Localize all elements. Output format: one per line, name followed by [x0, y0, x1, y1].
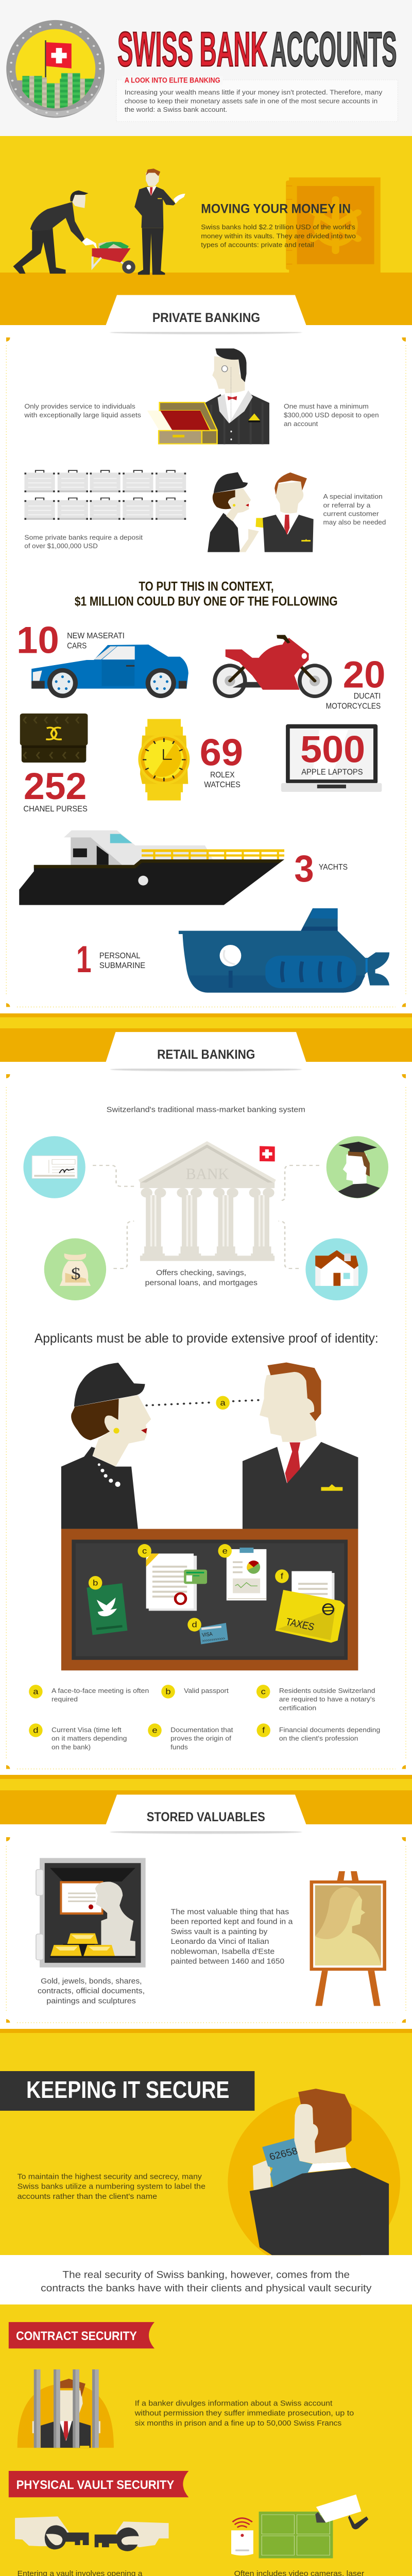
- heading tab: retail banking: RETAIL BANKING: [157, 1047, 255, 1061]
- background: white strip: [0, 2255, 412, 2304]
- figure: client pushing wheelbarrow: [13, 191, 135, 274]
- passport: b: [93, 1579, 98, 1587]
- icon: sensors and camera: [231, 2495, 368, 2558]
- marker a: [216, 1396, 230, 1410]
- panel: retail banking: [23, 1032, 388, 1346]
- origin of funds document: [218, 1544, 266, 1600]
- text: moving money description: Swiss banks hold $2.2 trillion USD of the world's: [201, 224, 355, 231]
- legend: c: certification: [279, 1704, 316, 1711]
- legend: a: A face-to-face meeting is often: [52, 1687, 149, 1694]
- text: minimum deposit: $300,000 USD deposit to open: [284, 411, 379, 419]
- ribbon: contract security: CONTRACT SECURITY: [16, 2329, 137, 2343]
- text: da vinci painting: Leonardo da Vinci of Italian: [171, 1938, 269, 1946]
- panel: private banking: [16, 348, 386, 710]
- text: vault contents: Gold, jewels, bonds, shares,: [41, 1977, 142, 1986]
- background: keeping it secure: [0, 2029, 412, 2255]
- item: chanel purses: 252: [24, 766, 87, 807]
- item: personal submarine: [76, 908, 389, 993]
- text: invitation required: current customer: [323, 510, 379, 517]
- background: moving money yellow band: [0, 136, 412, 273]
- visa card: [187, 1618, 228, 1644]
- heading tab: private banking: [106, 295, 306, 334]
- icon: ten briefcases: [24, 470, 186, 520]
- text: numbering system: [18, 2173, 205, 2200]
- legend: e: e: [152, 1726, 158, 1735]
- text: da vinci painting: Swiss vault is a painting by: [171, 1928, 267, 1936]
- icon: safe door: [286, 177, 381, 273]
- tax folder: TAXES: [284, 1616, 316, 1633]
- text: invitation required: or referral by a: [323, 501, 371, 509]
- origin of funds document: e: [222, 1547, 228, 1555]
- visa card: d: [192, 1620, 197, 1629]
- text: private banking for large assets: Only provides service to individuals: [24, 402, 135, 410]
- panel: header: [6, 20, 398, 122]
- legend: d: Current Visa (time left: [52, 1726, 122, 1734]
- heading tab: stored valuables: [106, 1794, 306, 1834]
- text: private banking for large assets: with exceptionally large liquid assets: [24, 411, 141, 419]
- item: twenty ducati motorcycles: 20: [343, 654, 385, 696]
- legend: b: Valid passport: [184, 1687, 229, 1694]
- text: real security statement: contracts the banks have with their clients and physical vault security: [41, 2282, 372, 2294]
- text: retail offerings: Offers checking, savings,: [156, 1269, 246, 1277]
- panel: legend lower row and stored valuables: [29, 1723, 386, 2006]
- legend: d: [29, 1723, 127, 1751]
- intro box: the world: a Swiss bank account.: [125, 106, 227, 113]
- text: minimum deposit: One must have a minimum: [284, 402, 369, 410]
- connectors: [93, 1165, 319, 1268]
- intro box: [116, 76, 398, 122]
- heading tab: retail banking: [106, 1032, 306, 1071]
- visa card: >>>>>>>>>>>>: [202, 1636, 226, 1643]
- heading: million context: TO PUT THIS IN CONTEXT,: [139, 579, 274, 594]
- item: rolex watches: 69: [200, 732, 243, 774]
- icon: graduate: [327, 1136, 388, 1198]
- background: retail banking panel: [0, 1062, 412, 1775]
- legend: c: [256, 1685, 375, 1711]
- item: apple laptops: APPLE LAPTOPS: [301, 768, 363, 776]
- figure: woman client: [61, 1363, 151, 1529]
- text: numbering system: To maintain the highest security and secrecy, many: [18, 2173, 202, 2181]
- legend: e: [148, 1723, 233, 1751]
- text: moving money description: types of accounts: private and retail: [201, 242, 314, 249]
- item: rolex watches: WATCHES: [204, 780, 241, 789]
- document board: [61, 1529, 358, 1670]
- text: real security statement: [41, 2269, 372, 2294]
- text: banker prosecution: [134, 2400, 354, 2428]
- dotted line: face to face: [147, 1400, 259, 1405]
- intro box: Increasing your wealth means little if your money isn't protected. Therefore, many: [125, 89, 383, 96]
- text: moving money description: money within its vaults. They are divided into two: [201, 232, 356, 240]
- item: personal submarine: SUBMARINE: [99, 961, 145, 970]
- item: personal submarine: 1: [76, 939, 92, 980]
- text: invitation required: A special invitation: [323, 493, 383, 500]
- item: ten maserati cars: CARS: [67, 641, 87, 650]
- figure: man with numbered card: 62658: [268, 2145, 299, 2162]
- panel frame: retail banking: [6, 1074, 406, 1769]
- text: retail offerings: [145, 1269, 258, 1287]
- icon: two keys: [15, 2516, 169, 2551]
- heading banner: keeping it secure: [0, 2071, 254, 2111]
- background: ground band: [0, 273, 412, 325]
- text: numbering system: accounts rather than the client's name: [18, 2193, 157, 2200]
- legend: f: [256, 1723, 380, 1742]
- text: over one million deposit: [24, 534, 143, 550]
- item: chanel purses: CHANEL PURSES: [23, 804, 88, 814]
- text: minimum deposit: [284, 402, 379, 428]
- background: retail divider: [0, 1013, 412, 1062]
- item: yachts: YACHTS: [319, 863, 348, 872]
- heading tab: private banking: PRIVATE BANKING: [152, 310, 260, 325]
- text: over one million deposit: Some private banks require a deposit: [24, 534, 143, 541]
- heading: million context: [75, 579, 338, 608]
- item: ten maserati cars: [16, 619, 188, 698]
- icon: vault porthole with flag and money: [6, 20, 105, 118]
- panel frame: private banking: [6, 337, 406, 1007]
- tax folder: [275, 1569, 345, 1642]
- legend: d: d: [33, 1726, 38, 1735]
- notary certificate: c: [142, 1547, 147, 1555]
- text: retail description: Switzerland's traditional mass-market banking system: [107, 1106, 305, 1114]
- item: chanel purses: [20, 714, 88, 814]
- legend: f: on the client's profession: [279, 1735, 358, 1742]
- text: private banking for large assets: [24, 402, 141, 419]
- legend: f: f: [262, 1726, 265, 1735]
- heading banner: keeping it secure: KEEPING IT SECURE: [26, 2076, 229, 2103]
- icon: money bag: [44, 1239, 106, 1300]
- text: da vinci painting: [171, 1908, 293, 1965]
- legend: b: [161, 1685, 229, 1699]
- figure: referral couple: [208, 472, 314, 552]
- legend: f: Financial documents depending: [279, 1726, 380, 1734]
- item: yachts: [19, 831, 348, 905]
- icon: bank building: [139, 1141, 276, 1261]
- item: apple laptops: 500: [300, 728, 365, 771]
- legend: b: b: [165, 1687, 171, 1696]
- icon: cheque: [23, 1136, 85, 1198]
- item: rolex watches: ROLEX: [210, 770, 235, 779]
- panel: moving your money in: [13, 168, 381, 334]
- tax folder: f: [281, 1572, 283, 1581]
- marker a: a: [220, 1398, 226, 1407]
- passport: [87, 1576, 127, 1635]
- legend: a: required: [52, 1696, 78, 1703]
- panel: luxury items: [19, 714, 389, 993]
- icon: house: [305, 1239, 368, 1300]
- item: twenty ducati motorcycles: [213, 635, 385, 710]
- text: retail offerings: personal loans, and mortgages: [145, 1279, 258, 1287]
- ribbon: physical vault security: PHYSICAL VAULT SECURITY: [16, 2478, 175, 2492]
- legend: c: are required to have a notary's: [279, 1696, 375, 1703]
- text: da vinci painting: painted between 1460 and 1650: [171, 1958, 284, 1965]
- text: da vinci painting: noblewoman, Isabella d'Este: [171, 1947, 274, 1956]
- icon: bank building: BANK: [186, 1165, 229, 1183]
- background: stored valuables panel: [0, 1824, 412, 2029]
- figure: man with numbered card: [228, 2089, 400, 2269]
- item: yachts: 3: [294, 848, 314, 890]
- item: ten maserati cars: NEW MASERATI: [67, 632, 125, 640]
- text: numbering system: Swiss banks utilize a numbering system to label the: [18, 2183, 205, 2191]
- text: vault contents: [38, 1977, 145, 2005]
- text: invitation required: may also be needed: [323, 518, 386, 526]
- panel: physical vault security: [9, 2471, 392, 2576]
- visa card: VISA: [201, 1631, 213, 1638]
- background: stored valuables divider: [0, 1775, 412, 1824]
- text: vault contents: contracts, official documents,: [38, 1987, 145, 1995]
- intro box: choose to keep their monetary assets safe in one of the most secure accounts in: [125, 97, 377, 105]
- legend: d: on it matters depending: [52, 1735, 127, 1742]
- legend: e: proves the origin of: [170, 1735, 231, 1742]
- icon: money bag: $: [71, 1264, 81, 1283]
- panel: identity proof: [29, 1363, 375, 1711]
- text: banker prosecution: six months in prison and a fine up to 50,000 Swiss Francs: [135, 2419, 341, 2428]
- text: moving money description: [201, 224, 356, 249]
- item: twenty ducati motorcycles: MOTORCYCLES: [326, 702, 381, 710]
- icon: painting on easel: [310, 1871, 386, 2006]
- background: header band: [0, 0, 412, 136]
- panel frame: stored valuables: [6, 1837, 406, 2023]
- item: personal submarine: PERSONAL: [99, 951, 140, 960]
- heading: moving your money in: MOVING YOUR MONEY IN: [201, 201, 351, 216]
- legend: a: [29, 1685, 149, 1703]
- ribbon: physical vault security: [9, 2471, 188, 2497]
- figure: banker behind bars: [18, 2369, 114, 2448]
- legend: a: a: [33, 1687, 39, 1696]
- legend: c: c: [261, 1687, 266, 1696]
- text: invitation required: [323, 493, 386, 526]
- item: ten maserati cars: 10: [16, 619, 59, 662]
- text: banker prosecution: without permission they suffer immediate prosecution, up to: [134, 2410, 354, 2417]
- legend: e: Documentation that: [170, 1726, 233, 1734]
- legend: e: funds: [170, 1743, 188, 1751]
- text: banker prosecution: If a banker divulges information about a Swiss account: [135, 2400, 333, 2408]
- panel: keeping it secure: [0, 2071, 400, 2448]
- figure: banker: [134, 168, 185, 275]
- text: over one million deposit: of over $1,000,000 USD: [24, 542, 98, 550]
- item: rolex watches: [138, 719, 243, 801]
- item: twenty ducati motorcycles: DUCATI: [354, 692, 381, 701]
- text: vault contents: paintings and sculptures: [46, 1997, 136, 2005]
- heading tab: stored valuables: STORED VALUABLES: [147, 1809, 265, 1824]
- notary certificate: [138, 1544, 207, 1611]
- text: da vinci painting: been reported kept and found in a: [171, 1918, 293, 1926]
- background: private banking panel: [0, 325, 412, 1013]
- ribbon: contract security: [9, 2322, 154, 2348]
- figure: monocle banker with case: [147, 348, 269, 444]
- figure: male banker: [243, 1363, 358, 1529]
- text: minimum deposit: an account: [284, 420, 318, 428]
- text: da vinci painting: The most valuable thing that has: [171, 1908, 289, 1916]
- text: real security statement: The real security of Swiss banking, however, comes from the: [62, 2269, 350, 2280]
- legend: d: on the bank): [52, 1743, 91, 1751]
- background: security yellow: [0, 2304, 412, 2576]
- intro box: A LOOK INTO ELITE BANKING: [125, 77, 220, 84]
- icon: open vault with valuables: [36, 1858, 146, 1968]
- item: apple laptops: [281, 724, 382, 792]
- legend: c: Residents outside Switzerland: [279, 1687, 375, 1694]
